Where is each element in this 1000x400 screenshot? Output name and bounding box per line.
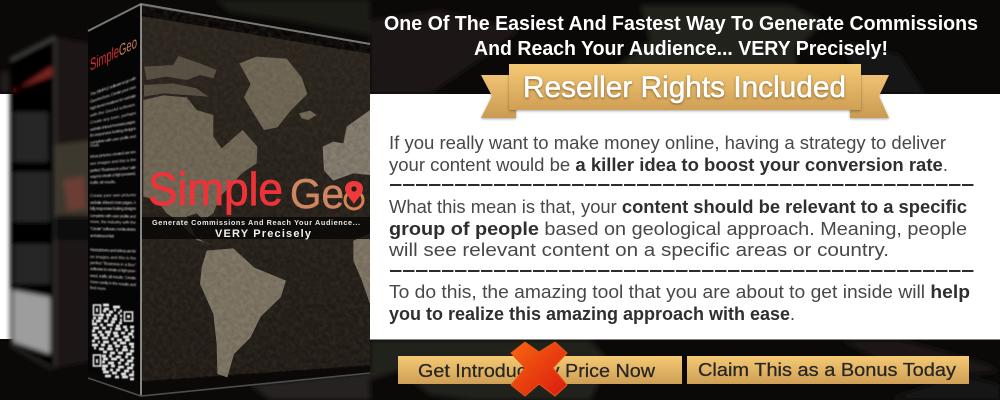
product box: spine xyxy=(88,4,370,396)
paragraph 1: your content would be a killer idea to boost your conversion rate . xyxy=(389,155,948,175)
spine description text: on images and this is the xyxy=(90,254,137,261)
product box: front face xyxy=(141,0,370,394)
box edges xyxy=(88,4,370,44)
paragraph 2: What this mean is that, your content should be relevant to a specific xyxy=(389,197,967,217)
ribbon left tail xyxy=(481,75,516,118)
spine description text: The SIMPLE software to go with xyxy=(90,75,137,97)
spine description text: and videos on fast xyxy=(90,233,115,238)
icon: location pin xyxy=(345,181,363,209)
headline xyxy=(384,13,978,60)
ribbon main xyxy=(509,64,861,110)
map: greenland xyxy=(239,57,307,130)
spine description text: with the GeoAd software. xyxy=(90,102,136,118)
button: Claim This as a Bonus Today: Claim This as a Bonus Today xyxy=(698,360,956,380)
map: europe xyxy=(323,110,370,181)
spine description text: more easily in the results and xyxy=(90,279,137,287)
spine description text: website shines! more pages. A xyxy=(90,200,136,205)
button: Get Introductory Price Now: Get Introductory Price Now xyxy=(418,361,656,381)
spine description text: GeoAnchors. Create your own xyxy=(90,84,137,104)
headline: One Of The Easiest And Fastest Way To Generate Commissions xyxy=(384,13,978,35)
ribbon right tail xyxy=(850,75,889,118)
QR code xyxy=(92,305,134,379)
spine logo: Simple xyxy=(90,41,119,75)
spine description text: Create your own pictures xyxy=(90,192,136,198)
icon: red cross xyxy=(511,342,567,396)
tagline band: VERY Precisely xyxy=(215,228,312,240)
spine description text: fully responsive looking designs xyxy=(90,206,136,211)
spine description text: "Create" software, media stories xyxy=(90,226,136,232)
logo: Simple Geo xyxy=(148,163,363,217)
spine description text: high-level creatives for website xyxy=(90,93,137,111)
spine description text: website shines! Increase pages. xyxy=(90,119,136,132)
spine description text: complete with user profile and xyxy=(90,133,137,145)
spine description text: ered, traffic all results. Create xyxy=(90,273,137,280)
paragraph 2: will see relevant content on a specific areas or country. xyxy=(388,240,889,260)
spine description text: complete with user profile and xyxy=(90,213,137,219)
spine description text: perfect "Business in a Box" with xyxy=(90,165,137,173)
ribbon: Reseller Rights Included: Reseller Rights Included xyxy=(523,71,846,104)
spine description text: more, the industry with the xyxy=(90,219,137,225)
ribbon: Reseller Rights Included xyxy=(481,64,889,118)
spine description text: traffic all results. xyxy=(90,179,116,185)
spine logo: Geo xyxy=(119,33,137,60)
paragraph 3 xyxy=(389,282,970,324)
spine description text: software to create a high-pow- xyxy=(90,266,137,273)
button: Claim This as a Bonus Today xyxy=(687,356,969,384)
panel: white left strip xyxy=(0,94,14,339)
spine description text: find more xyxy=(90,285,107,291)
map: arctic islands xyxy=(144,56,217,97)
logo word: Simple: Simple xyxy=(148,163,283,215)
tagline band xyxy=(141,217,370,240)
product box: blurred reflection xyxy=(10,37,100,369)
tagline band: Generate Commissions And Reach Your Audience... xyxy=(152,218,360,227)
paragraph 3: you to realize this amazing approach with ease. xyxy=(389,304,795,324)
paragraph 3: To do this, the amazing tool that you are about to get inside will help xyxy=(389,282,970,302)
text block: body copy xyxy=(388,133,970,324)
map: north america xyxy=(143,95,257,245)
paragraph 1: If you really want to make money online, having a strategy to deliver xyxy=(389,133,946,153)
paragraph 1 xyxy=(389,133,948,175)
spine description text: perfect "Business in a Box" xyxy=(90,260,136,267)
spine description text: Most pictures and videos are for xyxy=(90,247,137,254)
map: africa xyxy=(353,233,370,304)
spine description text: ways to create a high powered, xyxy=(90,171,136,179)
panel: white content xyxy=(370,94,1000,340)
map: iceland xyxy=(299,111,317,120)
headline: And Reach Your Audience... VERY Precisely! xyxy=(474,38,888,60)
spine description text xyxy=(90,75,137,291)
spine description text: It's responsive looking designs xyxy=(90,126,136,138)
spine description text: Most pictures created are ten xyxy=(90,149,137,159)
button: Get Introductory Price Now xyxy=(398,356,682,384)
spine description text: more. xyxy=(90,142,100,148)
paragraph 2: group of people based on geological approach. Meaning, people xyxy=(389,219,967,239)
map: south america xyxy=(200,248,286,377)
spine description text: sex images and this is the xyxy=(90,157,137,166)
logo word: Ge: Ge xyxy=(290,170,344,217)
paragraph 2 xyxy=(388,197,967,260)
spine description text: Create any town, perhaps xyxy=(90,110,136,125)
